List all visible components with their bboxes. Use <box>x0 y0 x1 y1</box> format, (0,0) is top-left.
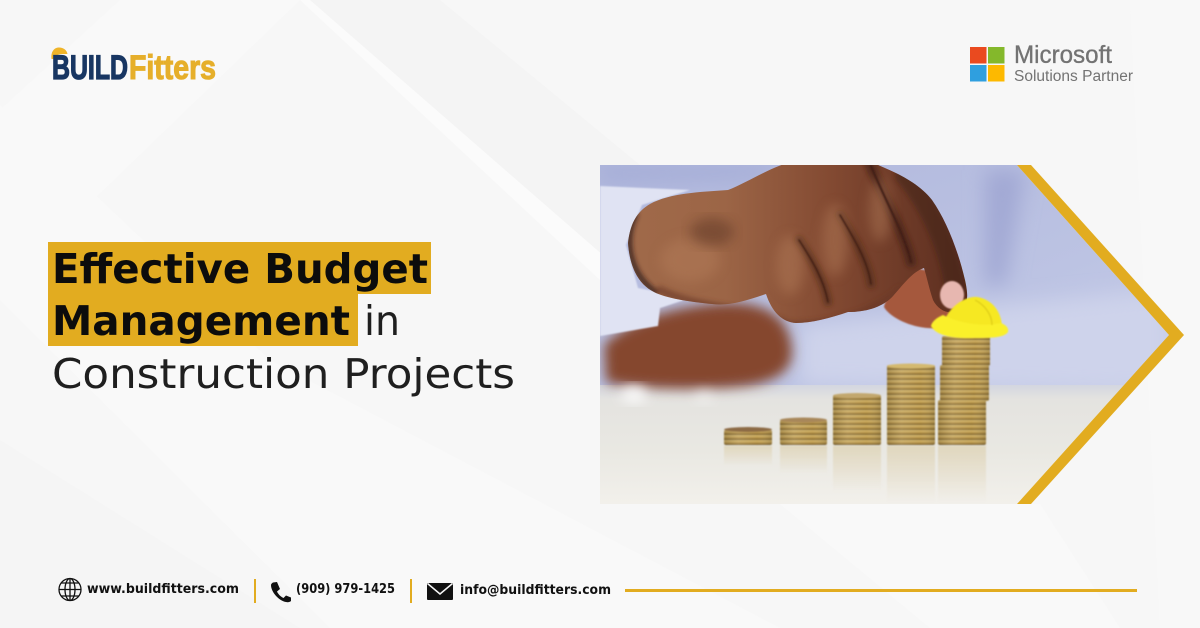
fingernail <box>940 281 964 309</box>
finger shading <box>629 160 955 325</box>
website: www.buildfitters.com <box>87 582 239 597</box>
coin stack 1 <box>724 427 772 445</box>
fist shape <box>620 160 970 330</box>
divider <box>410 579 412 603</box>
gold chevron frame <box>1017 165 1184 504</box>
icon: Microsoft squares <box>970 47 1004 82</box>
knuckle highlights <box>660 178 891 295</box>
logo: Microsoft Solutions Partner <box>970 41 1133 85</box>
icon: logo helmet <box>51 47 68 59</box>
coin reflections <box>724 446 986 490</box>
title highlight: line 2 <box>48 294 358 346</box>
title line 2 bold: Management <box>52 297 350 345</box>
title line 2 light: in <box>364 297 400 345</box>
phone number: (909) 979-1425 <box>296 582 395 597</box>
shirt folds <box>798 168 1164 385</box>
coin stack 3 <box>833 393 881 445</box>
blurred cuff highlights <box>621 385 713 403</box>
title highlight: line 1 <box>48 242 431 294</box>
photo backdrop: shirt <box>600 165 1169 385</box>
photo: hand stacking coins with helmet <box>600 160 1200 504</box>
shirt sleeve <box>600 186 690 336</box>
footer contact bar <box>59 578 1137 603</box>
photo: table <box>600 385 1124 504</box>
Microsoft wordmark: Microsoft <box>1014 41 1112 69</box>
yellow helmet <box>931 297 1008 338</box>
footer rule <box>625 589 1137 592</box>
logo: BuildFitters <box>51 47 216 87</box>
title line 3: Construction Projects <box>52 350 515 398</box>
Solutions Partner text: Solutions Partner <box>1014 68 1133 85</box>
logo wordmark <box>52 49 216 87</box>
thumb <box>883 268 950 330</box>
main fist <box>620 160 970 330</box>
title block <box>48 242 515 398</box>
email: info@buildfitters.com <box>460 583 611 598</box>
coin stack 5 <box>938 336 990 445</box>
logo wordmark: BUILD <box>52 49 128 87</box>
finger creases <box>799 166 911 302</box>
coin stack 4 <box>887 364 935 445</box>
icon: globe <box>59 578 81 600</box>
coin stack 2 <box>780 418 827 445</box>
icon: phone <box>271 582 291 602</box>
logo wordmark: Fitters <box>129 49 216 87</box>
icon: envelope <box>427 583 453 600</box>
coin stacks <box>724 336 990 445</box>
hair texture on hand <box>690 218 734 246</box>
blurred lower hand <box>604 303 792 389</box>
divider <box>254 579 256 603</box>
title line 1: Effective Budget <box>52 245 428 293</box>
